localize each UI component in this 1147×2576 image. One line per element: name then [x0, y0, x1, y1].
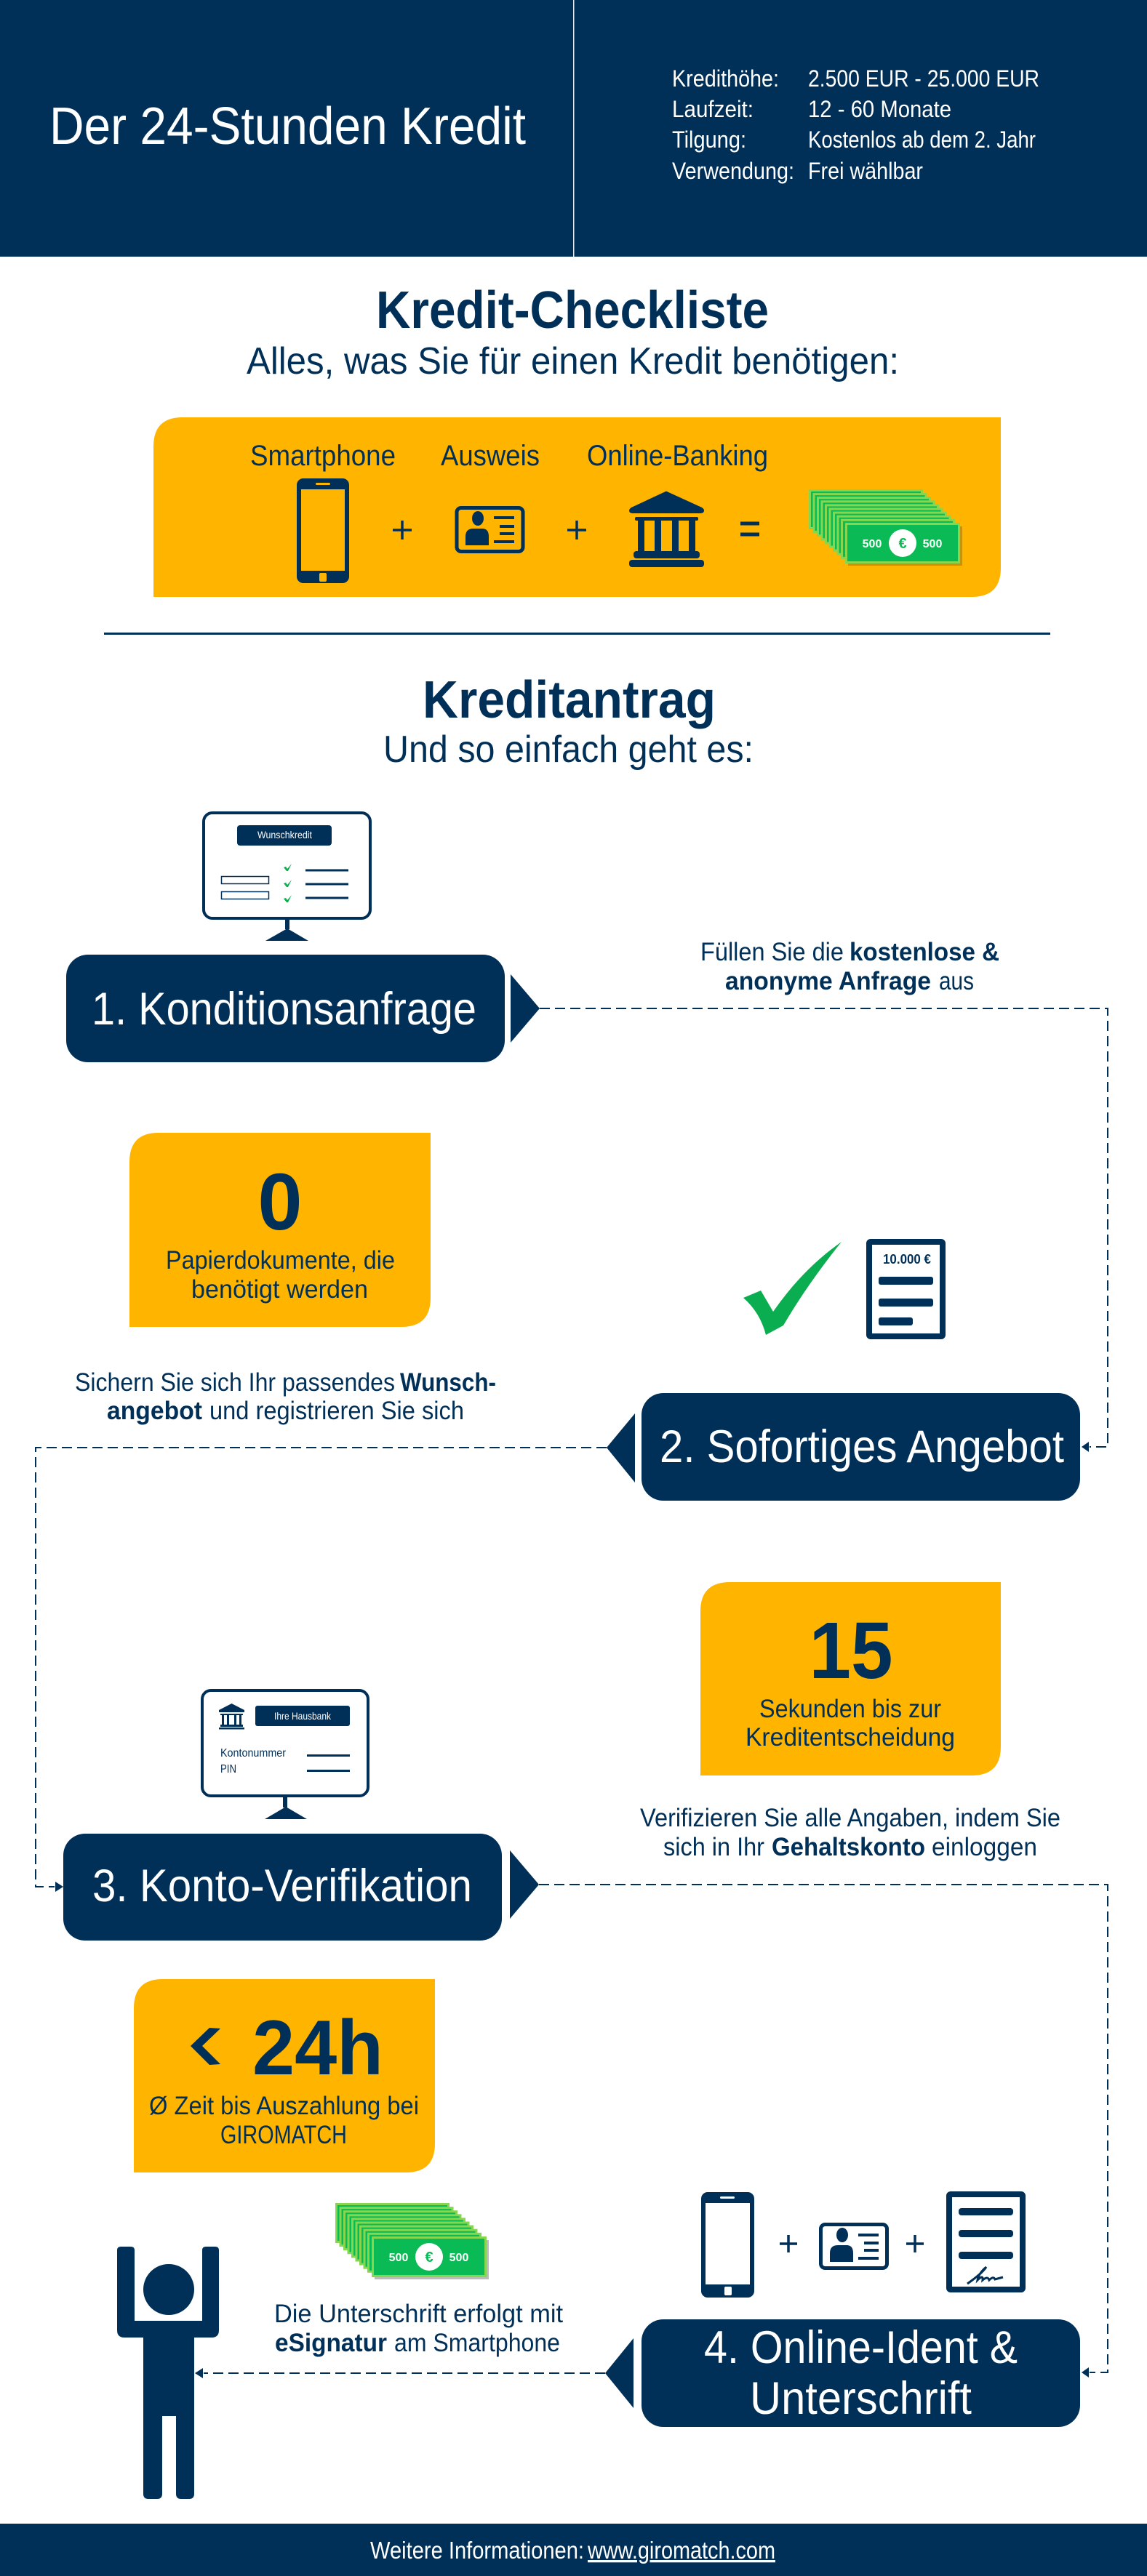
text: step 2 description: Sichern Sie sich Ihr passendes [75, 1368, 395, 1397]
heading: Kredit-Checkliste: Alles, was Sie für einen Kredit benötigen: [247, 340, 899, 382]
icon: smartphone [297, 478, 349, 583]
icon: smartphone [701, 2192, 754, 2298]
heading: Kredit-Checkliste: Kredit-Checkliste [376, 281, 769, 340]
icon: monitor with bank login: Ihre Hausbank [274, 1710, 332, 1722]
callout: 0 paper documents: Papierdokumente, die [166, 1246, 395, 1275]
text: step 1 description: Füllen Sie die [700, 938, 844, 966]
icon: offer document: 10.000 € [883, 1252, 931, 1267]
icon: ID card [820, 2225, 887, 2268]
icon: money stack [336, 2204, 489, 2279]
heading: Kreditantrag: Und so einfach geht es: [383, 729, 754, 771]
step 2: Sofortiges Angebot: 2. Sofortiges Angebot [660, 1421, 1064, 1472]
callout: under 24 hours: GIROMATCH [220, 2121, 347, 2149]
text: step 1 description: kostenlose & [850, 938, 999, 966]
icon: money stack: € [425, 2250, 433, 2266]
footer: www.giromatch.com [587, 2537, 775, 2564]
text: step 2 description: angebot [107, 1397, 202, 1425]
loan facts table: Verwendung: [672, 158, 794, 184]
loan facts table: 2.500 EUR - 25.000 EUR [808, 65, 1039, 92]
text: step 3 description: einloggen [932, 1833, 1037, 1861]
text: step 3 description [640, 1804, 1060, 1861]
text: step 4 description: am Smartphone [394, 2329, 560, 2357]
icon: plus [906, 2235, 924, 2252]
loan facts table: Frei wählbar [808, 158, 923, 184]
label: Smartphone: Smartphone [250, 440, 396, 472]
text: step 3 description: Gehaltskonto [772, 1833, 925, 1861]
icon: plus [393, 521, 412, 539]
icon: monitor with Wunschkredit form [204, 813, 370, 941]
text: step 2 description [75, 1368, 496, 1425]
icon: monitor with bank login [202, 1690, 368, 1819]
icon: ID card [457, 507, 523, 551]
callout: 15 seconds: Sekunden bis zur [759, 1695, 941, 1723]
icon: plus [780, 2235, 797, 2252]
footer: Weitere Informationen: [370, 2537, 584, 2564]
arrow: step 2 to step 3 [36, 1448, 607, 1892]
heading: Kredit-Checkliste [247, 281, 899, 382]
text: step 2 description: Wunsch- [400, 1368, 496, 1397]
icon: money stack [810, 490, 962, 566]
text: step 3 description: sich in Ihr [663, 1833, 764, 1861]
step 4: Online-Ident & Unterschrift [605, 2319, 1080, 2427]
title: Der 24-Stunden Kredit [49, 97, 526, 156]
text: step 2 description: und registrieren Sie sich [209, 1397, 464, 1425]
step 3: Konto-Verifikation [63, 1834, 539, 1941]
panel: checklist [153, 417, 1001, 597]
callout: 15 seconds [700, 1582, 1001, 1775]
text: step 4 description: eSignatur [275, 2329, 387, 2357]
icon: money stack: 500 [449, 2252, 468, 2264]
icon: money stack: € [898, 536, 907, 552]
loan facts table [672, 65, 1039, 184]
loan facts table: 12 - 60 Monate [808, 96, 951, 122]
icon: plus [567, 521, 586, 539]
icon: small bank [219, 1704, 244, 1729]
loan facts table: Kredithöhe: [672, 65, 779, 92]
icon: monitor with bank login: PIN [220, 1763, 236, 1775]
loan facts table: Tilgung: [672, 127, 746, 153]
text: step 1 description: anonyme Anfrage [725, 967, 931, 995]
header band [0, 0, 1147, 257]
callout: under 24 hours [134, 1979, 435, 2172]
text: step 1 description: aus [939, 967, 974, 995]
text: step 3 description: Verifizieren Sie alle Angaben, indem Sie [640, 1804, 1060, 1832]
icon: money stack: 500 [863, 538, 882, 550]
arrow: step 3 to step 4 [539, 1885, 1108, 2378]
icon: monitor with bank login: Kontonummer [220, 1747, 287, 1760]
label: Ausweis: Ausweis [441, 440, 540, 472]
text: step 4 description: Die Unterschrift erfolgt mit [274, 2300, 563, 2328]
text: step 1 description [700, 938, 999, 995]
arrow: step 4 to person [195, 2368, 605, 2378]
step 2: Sofortiges Angebot [607, 1393, 1080, 1501]
icon: money stack: 500 [923, 538, 942, 550]
icon: bank [629, 491, 704, 567]
loan facts table: Kostenlos ab dem 2. Jahr [808, 127, 1036, 153]
heading: Kreditantrag [383, 671, 754, 771]
step 4: Online-Ident & Unterschrift: Unterschrift [750, 2373, 972, 2424]
icon: contract with signature [949, 2194, 1023, 2290]
arrow: step 1 to step 2 [540, 1008, 1108, 1452]
heading: Kreditantrag: Kreditantrag [423, 671, 716, 729]
callout: under 24 hours: 24h [252, 2004, 383, 2091]
icon: person with raised arms [117, 2247, 219, 2499]
callout: 15 seconds: 15 [809, 1606, 893, 1696]
label: Online-Banking: Online-Banking [587, 440, 768, 472]
footer [0, 2524, 1147, 2576]
callout: 0 paper documents [129, 1133, 431, 1327]
icon: green check [743, 1242, 842, 1335]
callout: 0 paper documents: benötigt werden [191, 1275, 368, 1304]
icon: equals [740, 523, 759, 534]
callout: under 24 hours: Ø Zeit bis Auszahlung bei [149, 2092, 419, 2120]
callout: 0 paper documents: 0 [257, 1157, 303, 1247]
icon: monitor with Wunschkredit form: Wunschkredit [257, 829, 312, 840]
icon: offer document [869, 1242, 943, 1336]
text: step 4 description [274, 2300, 563, 2357]
callout: 15 seconds: Kreditentscheidung [746, 1723, 955, 1752]
step 1: Konditionsanfrage [66, 955, 540, 1062]
loan facts table: Laufzeit: [672, 96, 754, 122]
icon: money stack: 500 [389, 2252, 408, 2264]
step 3: Konto-Verifikation: 3. Konto-Verifikation [92, 1861, 472, 1911]
icon: less-than sign [191, 2028, 220, 2065]
step 1: Konditionsanfrage: 1. Konditionsanfrage [92, 984, 476, 1035]
step 4: Online-Ident & Unterschrift: 4. Online-Ident & [704, 2322, 1018, 2373]
